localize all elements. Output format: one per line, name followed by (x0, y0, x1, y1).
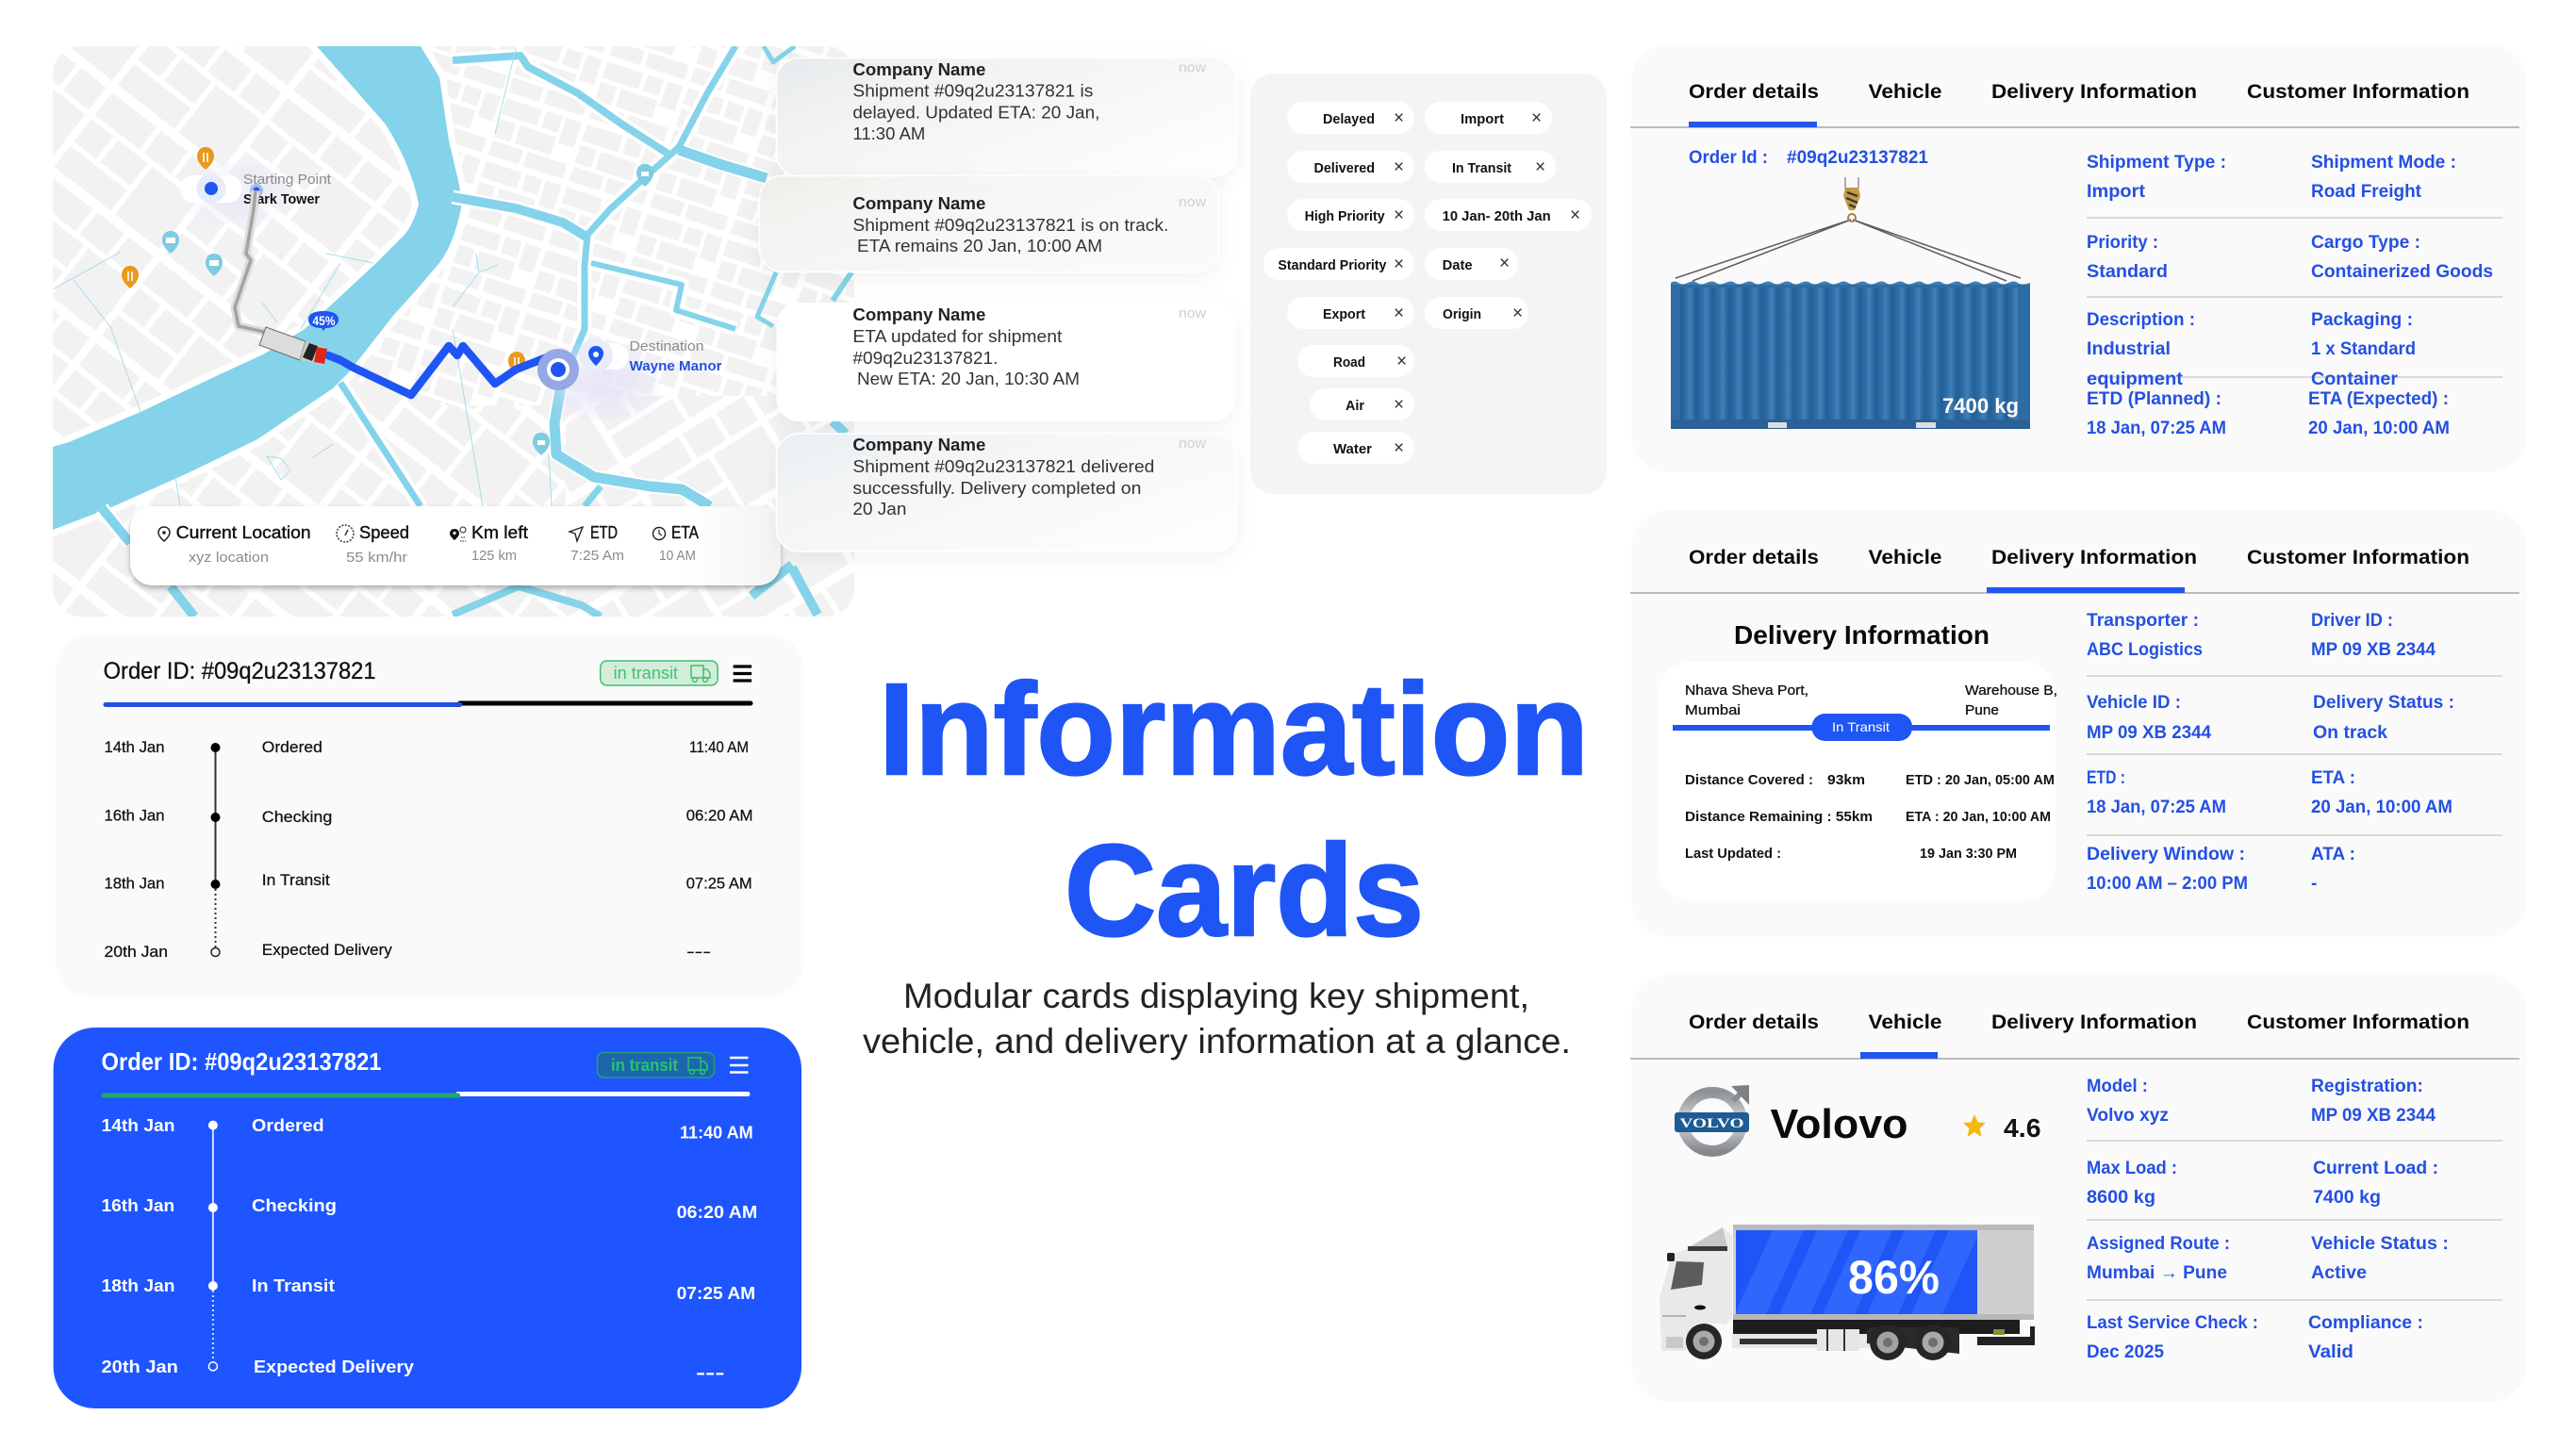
notification: delivered: Company Name (852, 436, 985, 454)
river and canals (53, 46, 851, 617)
km left: 125 km (471, 548, 517, 564)
row: In Transit: 18th Jan (104, 875, 164, 893)
chip: Delayed: × (1394, 108, 1404, 128)
shipment status bar (130, 506, 781, 585)
field: eta expected: ETA (Expected) : (2308, 389, 2449, 409)
field: registration: Registration: (2311, 1077, 2423, 1096)
tabs: Customer Information (2247, 1012, 2469, 1033)
field: current load: 7400 kg (2313, 1188, 2381, 1208)
chip: In Transit: In Transit (1452, 161, 1511, 176)
order fields (2087, 153, 2502, 438)
row: Expected Delivery (102, 1358, 725, 1382)
field: vehicle status (2311, 1234, 2449, 1283)
field: etd planned (2087, 389, 2226, 438)
row: In Transit: In Transit (252, 1276, 335, 1295)
row: Checking (102, 1196, 757, 1222)
chip: Export (1287, 297, 1414, 329)
brand name: Volovo (1771, 1101, 1908, 1147)
field: max load: 8600 kg (2087, 1188, 2155, 1208)
row: Expected Delivery: --- (686, 943, 711, 961)
container illustration (1671, 177, 2030, 429)
field: model: Volvo xyz (2087, 1106, 2169, 1126)
panel: order details (1630, 44, 2527, 472)
notification: delivered: Shipment #09q2u23137821 delivered (852, 457, 1154, 476)
order id (1689, 148, 1928, 168)
notification: delayed: Shipment #09q2u23137821 is (852, 82, 1093, 101)
field: shipment mode (2311, 153, 2456, 202)
field: shipment type (2087, 153, 2226, 202)
etd: 7:25 Am (570, 548, 624, 564)
badge: in transit: in transit (614, 664, 678, 683)
field: model: Model : (2087, 1077, 2148, 1096)
notification: ETA updated: now (1179, 305, 1206, 321)
destination marker: Destination (630, 338, 703, 354)
subtitle: vehicle, and delivery information at a glance. (863, 1022, 1571, 1061)
notification: delayed: delayed. Updated ETA: 20 Jan, (852, 104, 1099, 123)
chip: Delivered: × (1394, 157, 1404, 177)
eta (652, 523, 699, 564)
current location: xyz location (189, 550, 269, 566)
badge: in transit: in transit (611, 1056, 678, 1075)
chip: Standard Priority (1263, 248, 1414, 280)
row: Ordered: Ordered (252, 1116, 324, 1135)
route card: Warehouse B, (1965, 683, 2057, 699)
chip: Date: Date (1443, 258, 1473, 273)
row: Ordered (102, 1116, 753, 1143)
panel: order timeline light (56, 635, 803, 996)
notification: delivered: 20 Jan (852, 500, 906, 518)
field: etd (2087, 768, 2226, 817)
field: cargo type: Containerized Goods (2311, 262, 2493, 282)
tabs (1630, 81, 2519, 128)
panel: route map (53, 46, 854, 617)
panel: filter chips (1250, 74, 1607, 494)
route card: Last Updated : (1685, 846, 1781, 862)
tabs: Vehicle (1869, 1012, 1942, 1033)
field: delivery status: On track (2313, 723, 2387, 743)
field: last service check: Last Service Check : (2087, 1313, 2258, 1333)
notification: on track: Company Name (852, 194, 985, 213)
destination marker: Wayne Manor (630, 358, 722, 374)
subtitle: Modular cards displaying key shipment, (903, 977, 1529, 1015)
field: eta: 20 Jan, 10:00 AM (2311, 798, 2452, 817)
tabs: Delivery Information (1991, 81, 2197, 103)
chip: Water: × (1394, 438, 1404, 458)
tabs: Order details (1689, 1012, 1819, 1033)
field: description: Industrial (2087, 339, 2171, 359)
field: description: equipment (2087, 370, 2184, 389)
tabs: Customer Information (2247, 81, 2469, 103)
field: vehicle id: MP 09 XB 2344 (2087, 723, 2211, 743)
route card (1658, 662, 2057, 900)
field: vehicle id (2087, 693, 2211, 743)
icon: truck on route (259, 327, 327, 365)
field: shipment mode: Road Freight (2311, 182, 2422, 202)
icon: volvo logo (1675, 1085, 1749, 1151)
field: priority: Priority : (2087, 233, 2158, 253)
blue remaining route (328, 346, 547, 395)
grey travelled route (235, 190, 264, 332)
field: registration (2311, 1077, 2436, 1126)
chip: In Transit (1425, 151, 1556, 183)
chip: Export: Export (1323, 307, 1365, 322)
field: packaging: 1 x Standard (2311, 339, 2416, 359)
field: assigned route (2087, 1234, 2230, 1283)
field: delivery status (2313, 693, 2454, 743)
row: Ordered: 11:40 AM (680, 1124, 753, 1143)
order id: Order Id : (1689, 148, 1768, 168)
route card: 19 Jan 3:30 PM (1920, 846, 2017, 862)
icon: menu (730, 1058, 749, 1073)
chip: Delayed: Delayed (1323, 112, 1375, 127)
km left (450, 523, 528, 564)
tabs (1630, 547, 2519, 594)
progress bubble: 45% (313, 313, 336, 328)
field: shipment type: Shipment Type : (2087, 153, 2226, 173)
weight label: 7400 kg (1942, 394, 2019, 418)
notification: ETA updated: #09q2u23137821. (852, 349, 998, 368)
chip: High Priority (1287, 199, 1414, 231)
chip: date range: × (1570, 206, 1580, 225)
field: etd planned: 18 Jan, 07:25 AM (2087, 419, 2226, 438)
field: description (2087, 310, 2195, 389)
chip: date range (1425, 199, 1592, 231)
field: packaging: Container (2311, 370, 2399, 389)
chip: Origin: Origin (1443, 307, 1481, 322)
notification: ETA updated: Company Name (852, 305, 985, 324)
tabs: Customer Information (2247, 547, 2469, 568)
row: In Transit (102, 1276, 755, 1303)
timeline rail (208, 1121, 218, 1371)
order id: #09q2u23137821 (1787, 148, 1928, 168)
current location: Current Location (176, 523, 311, 542)
notification: delivered: now (1179, 436, 1206, 452)
route card: Nhava Sheva Port, (1685, 683, 1808, 699)
row: Ordered: Ordered (262, 738, 322, 756)
in transit pill: In Transit (1832, 719, 1890, 734)
notification: delivered (777, 434, 1237, 551)
tabs: Delivery Information (1991, 1012, 2197, 1033)
eta: ETA (671, 523, 699, 542)
notification: ETA updated: ETA updated for shipment (852, 327, 1062, 346)
chip: Origin: × (1512, 304, 1523, 323)
chip: In Transit: × (1535, 157, 1545, 177)
etd (570, 523, 624, 564)
row: Checking: Checking (262, 808, 332, 826)
icon: menu (734, 666, 751, 681)
load fill (1735, 1230, 1980, 1314)
load fill: 86% (1848, 1251, 1940, 1304)
cab (1660, 1227, 1732, 1351)
field: shipment mode: Shipment Mode : (2311, 153, 2456, 173)
notification: on track: Shipment #09q2u23137821 is on track. (852, 216, 1168, 235)
field: delivery window: 10:00 AM – 2:00 PM (2087, 874, 2248, 894)
chip: Import: × (1531, 108, 1542, 128)
speed: 55 km/hr (346, 550, 407, 566)
row: Expected Delivery: Expected Delivery (254, 1358, 414, 1376)
subtitle (863, 977, 1571, 1061)
chip: Standard Priority: × (1394, 255, 1404, 274)
field: driver id: Driver ID : (2311, 611, 2393, 631)
chip: Import: Import (1461, 112, 1504, 127)
starting point marker (180, 172, 332, 207)
order id heading: Order ID: #09q2u23137821 (104, 658, 376, 684)
title (879, 657, 1589, 963)
row: Checking: 16th Jan (104, 807, 164, 824)
notification: delayed: 11:30 AM (852, 124, 925, 143)
field: max load: Max Load : (2087, 1159, 2177, 1178)
field: cargo type: Cargo Type : (2311, 233, 2420, 253)
tabs: Vehicle (1869, 81, 1942, 103)
field: compliance (2308, 1313, 2423, 1362)
chip: Road (1297, 345, 1414, 377)
speed (337, 523, 409, 566)
route line (1673, 725, 2050, 731)
rating (1963, 1113, 2040, 1143)
delivery heading: Delivery Information (1734, 620, 1990, 650)
field: driver id: MP 09 XB 2344 (2311, 640, 2436, 660)
route card: ETD : 20 Jan, 05:00 AM (1906, 772, 2055, 788)
field: delivery window (2087, 845, 2248, 894)
speed: Speed (359, 523, 409, 542)
chip: Air: Air (1346, 399, 1364, 414)
km left: Km left (471, 523, 528, 542)
row: In Transit: 07:25 AM (686, 875, 752, 893)
row: In Transit: 07:25 AM (677, 1284, 755, 1303)
in transit pill (1812, 714, 1912, 741)
notification: delivered: successfully. Delivery completed on (852, 479, 1141, 498)
row: Checking: 06:20 AM (677, 1203, 757, 1222)
field: model (2087, 1077, 2169, 1126)
row: Ordered (104, 738, 749, 756)
field: description: Description : (2087, 310, 2195, 330)
panel: notifications (760, 58, 1237, 551)
etd: ETD (590, 523, 618, 542)
tabs: Order details (1689, 547, 1819, 568)
panel: vehicle (1630, 1014, 2519, 1360)
row: Checking: 16th Jan (102, 1196, 174, 1215)
notification: ETA updated: New ETA: 20 Jan, 10:30 AM (857, 370, 1080, 388)
field: cargo type (2311, 233, 2493, 282)
field: vehicle status: Vehicle Status : (2311, 1234, 2449, 1254)
panel: order timeline blue (54, 1028, 801, 1408)
chip: Delivered (1287, 151, 1414, 183)
field: packaging: Packaging : (2311, 310, 2413, 330)
chip: Date: × (1499, 254, 1510, 273)
field: vehicle id: Vehicle ID : (2087, 693, 2181, 713)
row: Ordered: 14th Jan (102, 1116, 175, 1135)
row: Expected Delivery: Expected Delivery (262, 941, 392, 959)
field: last service check (2087, 1313, 2258, 1362)
field: ata: ATA : (2311, 845, 2355, 864)
timeline rail (211, 743, 221, 956)
chip: Import (1425, 102, 1552, 134)
chassis (1732, 1320, 2035, 1354)
wheels (1686, 1324, 1951, 1360)
field: transporter (2087, 611, 2203, 660)
field: priority: Standard (2087, 262, 2168, 282)
route card: ETA : 20 Jan, 10:00 AM (1906, 809, 2051, 825)
row: In Transit: In Transit (262, 871, 330, 889)
row: In Transit: 18th Jan (102, 1276, 175, 1295)
route card: Distance Covered : (1685, 772, 1813, 788)
field: delivery window: Delivery Window : (2087, 845, 2245, 864)
current location (158, 523, 311, 566)
field: delivery status: Delivery Status : (2313, 693, 2454, 713)
field: current load (2313, 1159, 2438, 1208)
chip: Delivered: Delivered (1314, 161, 1375, 176)
field: compliance: Compliance : (2308, 1313, 2423, 1333)
destination marker (537, 338, 722, 390)
field: current load: Current Load : (2313, 1159, 2438, 1178)
route card: Pune (1965, 702, 1999, 718)
panel: delivery information (1630, 510, 2527, 937)
chip: Air (1310, 388, 1414, 420)
row: Expected Delivery: --- (696, 1363, 725, 1382)
field: vehicle status: Active (2311, 1263, 2367, 1283)
field: etd: 18 Jan, 07:25 AM (2087, 798, 2226, 817)
field: eta expected (2308, 389, 2450, 438)
chip: Date (1425, 248, 1518, 280)
chip: High Priority: × (1394, 206, 1404, 225)
delivery fields (2087, 611, 2502, 894)
field: ata: - (2311, 874, 2317, 894)
tabs: Delivery Information (1991, 547, 2197, 568)
vehicle fields (2087, 1077, 2502, 1362)
chip: Air: × (1394, 395, 1404, 415)
field: compliance: Valid (2308, 1342, 2353, 1362)
field: transporter: ABC Logistics (2087, 640, 2203, 660)
field: assigned route: Assigned Route : (2087, 1234, 2230, 1254)
field: last service check: Dec 2025 (2087, 1342, 2164, 1362)
route card: Mumbai (1685, 702, 1741, 718)
badge: in transit (601, 661, 718, 685)
field: max load (2087, 1159, 2177, 1208)
tabs: Vehicle (1869, 547, 1942, 568)
badge: in transit (598, 1052, 715, 1078)
field: eta: ETA : (2311, 768, 2355, 788)
field: driver id (2311, 611, 2436, 660)
row: Expected Delivery (104, 941, 711, 961)
field: etd: ETD : (2087, 768, 2125, 788)
row: Checking (104, 807, 752, 826)
chip: High Priority: High Priority (1305, 209, 1385, 224)
map pins (122, 147, 653, 455)
title: Cards (1065, 818, 1424, 963)
row: Checking: Checking (252, 1196, 337, 1215)
icon: volvo logo: VOLVO (1680, 1116, 1744, 1131)
field: registration: MP 09 XB 2344 (2311, 1106, 2436, 1126)
route card: 93km (1827, 772, 1865, 788)
notification: on track: ETA remains 20 Jan, 10:00 AM (857, 237, 1102, 255)
chip: Road: Road (1333, 355, 1365, 370)
notification: on track (760, 175, 1218, 272)
progress bar (106, 703, 751, 705)
field: transporter: Transporter : (2087, 611, 2199, 631)
field: ata (2311, 845, 2355, 894)
chip: Water: Water (1333, 442, 1372, 457)
starting point marker: Stark Tower (243, 191, 320, 207)
field: packaging (2311, 310, 2416, 389)
chip: Export: × (1394, 304, 1404, 323)
title: Information (879, 657, 1589, 802)
rating: 4.6 (2004, 1113, 2040, 1143)
tabs: Order details (1689, 81, 1819, 103)
field: priority (2087, 233, 2168, 282)
starting point marker: Starting Point (243, 172, 332, 188)
notification: delayed: now (1179, 60, 1206, 76)
tabs (1630, 1012, 2519, 1060)
chip: Water (1297, 432, 1414, 464)
map background (53, 46, 854, 617)
row: Expected Delivery: 20th Jan (104, 943, 168, 961)
progress bar (104, 1094, 748, 1095)
chip: Road: × (1396, 352, 1407, 371)
chip: Standard Priority: Standard Priority (1278, 258, 1386, 273)
row: Ordered: 11:40 AM (689, 738, 749, 756)
notification: on track: now (1179, 194, 1206, 210)
field: shipment type: Import (2087, 182, 2146, 202)
progress bubble (308, 311, 339, 331)
row: Ordered: 14th Jan (104, 738, 164, 756)
notification: delayed: Company Name (852, 60, 985, 79)
chip: Origin (1425, 297, 1528, 329)
field: etd planned: ETD (Planned) : (2087, 389, 2221, 409)
order id heading: Order ID: #09q2u23137821 (102, 1047, 381, 1076)
row: Expected Delivery: 20th Jan (102, 1358, 178, 1376)
route card: Distance Remaining : 55km (1685, 809, 1873, 825)
truck illustration (1660, 1225, 2035, 1360)
eta: 10 AM (659, 548, 696, 564)
notification: ETA updated (777, 303, 1235, 421)
field: assigned route: Mumbai → Pune (2087, 1263, 2227, 1283)
field: eta expected: 20 Jan, 10:00 AM (2308, 419, 2450, 438)
row: In Transit (104, 871, 752, 893)
row: Checking: 06:20 AM (686, 807, 752, 824)
field: eta (2311, 768, 2452, 817)
chip: date range: 10 Jan- 20th Jan (1443, 209, 1551, 224)
chip: Delayed (1287, 102, 1414, 134)
notification: delayed (777, 58, 1237, 176)
